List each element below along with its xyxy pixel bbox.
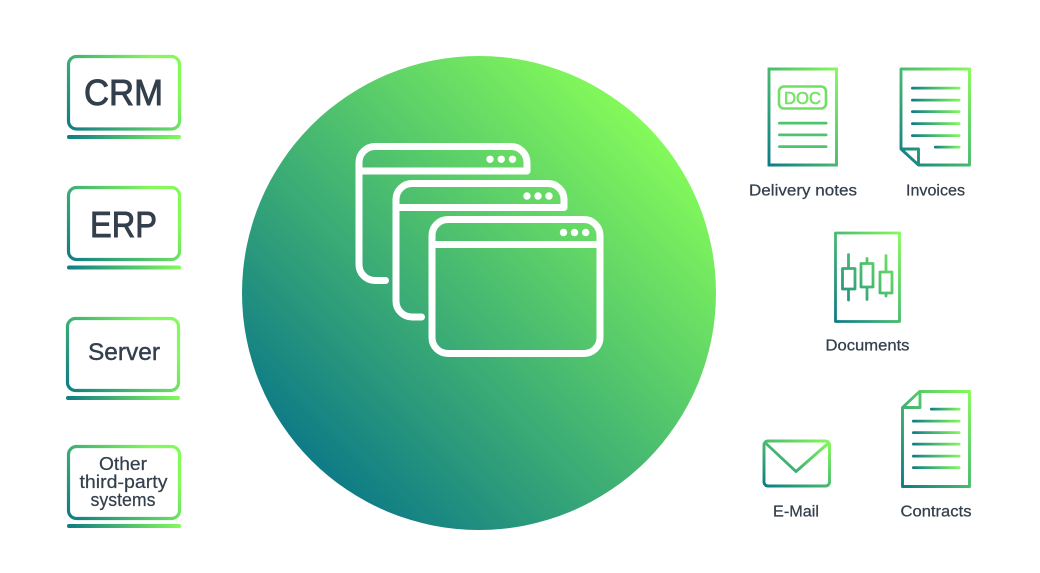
- system: Other third-party systems: [67, 446, 181, 528]
- circle: [242, 56, 716, 530]
- icon: stacked browser windows: [359, 146, 600, 354]
- system: CRM: CRM: [84, 72, 163, 113]
- document: Delivery notes: [749, 69, 857, 200]
- front window: [432, 220, 600, 354]
- system: Other third-party systems: systems: [90, 490, 156, 510]
- document: Delivery notes: DOC: [784, 88, 821, 108]
- system: Server: [66, 318, 180, 400]
- central gradient circle with browser windows: [242, 56, 716, 530]
- document: Delivery notes: Delivery notes: [749, 182, 857, 200]
- system: Server: Server: [88, 339, 160, 366]
- document: Invoices: [901, 69, 970, 200]
- document: Documents chart: [826, 233, 910, 354]
- document: E-Mail: [764, 441, 830, 520]
- back window: [359, 146, 527, 280]
- document: Invoices: Invoices: [906, 182, 965, 200]
- system: ERP: [67, 188, 181, 270]
- document: Contracts: Contracts: [900, 504, 972, 520]
- system: ERP: ERP: [90, 204, 157, 245]
- document: Documents chart: Documents: [826, 338, 910, 354]
- document: E-Mail: E-Mail: [773, 504, 819, 520]
- document: Contracts: [900, 392, 972, 520]
- system: CRM: [67, 56, 181, 139]
- system: Other third-party systems: third-party: [80, 472, 168, 492]
- system: Other third-party systems: Other: [99, 454, 147, 474]
- middle window: [396, 184, 564, 317]
